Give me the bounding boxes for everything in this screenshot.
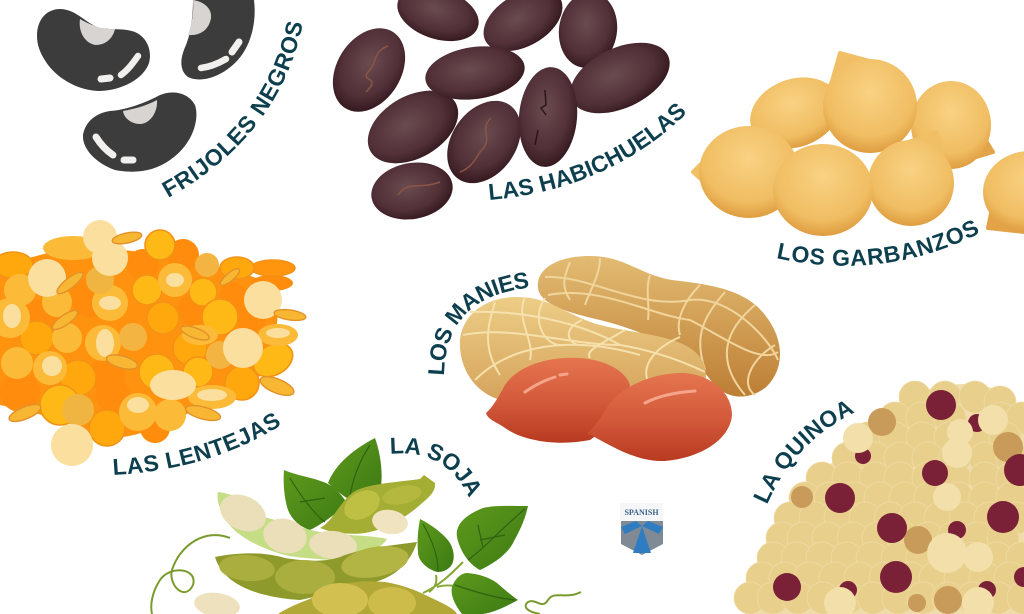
label: los garbanzos: LOS GARBANZOS [778,220,978,266]
leaf: right large [457,506,528,570]
chickpea: back left [740,65,850,161]
chickpea: right [911,81,993,169]
leaf: back left [284,470,347,530]
tendril: left [151,535,230,614]
bean: black bean right [181,0,255,79]
illustration: peanuts [460,256,780,461]
chickpea: left [693,126,799,218]
bean: bottom cream [193,590,241,614]
pod: bottom [278,581,457,614]
leaf: right bottom [452,573,518,614]
bean: black bean left [37,9,150,91]
chickpea: far right [983,151,1024,233]
leaf: back top [328,438,382,500]
logo: shield [620,503,663,555]
pod: large middle [215,541,417,600]
tendril: right [526,592,581,614]
label: frijoles negros: FRIJOLES NEGROS [162,22,302,198]
peanut kernel: right [587,373,732,461]
illustration: kidney beans [318,0,681,226]
illustration: soybeans [151,438,581,614]
illustration: quinoa [734,381,1024,614]
peanut kernel: left [486,358,630,443]
label: los manies: LOS MANIES [428,272,528,374]
chickpea: right front [868,132,954,226]
chickpea: top [823,53,917,153]
illustration: black beans [37,0,255,172]
chickpea: center [773,144,873,236]
bean: black bean bottom [83,92,196,172]
peanut shell: front pod [460,297,706,402]
stems [423,562,463,593]
bean: floating cream [370,507,410,537]
pod: top right [320,475,435,534]
label: las habichuelas: LAS HABICHUELAS [489,104,685,200]
label: la soja: LA SOJA [391,438,480,498]
illustration: chickpeas [693,53,1024,236]
logo text: SPANISH [624,508,659,517]
illustration: lentils [0,220,307,466]
pod: open with beans [214,487,387,561]
peanut shell: back pod [538,256,780,397]
leaf: right small [418,519,454,572]
label: la quinoa: LA QUINOA [753,401,854,504]
label: las lentejas: LAS LENTEJAS [114,413,280,475]
